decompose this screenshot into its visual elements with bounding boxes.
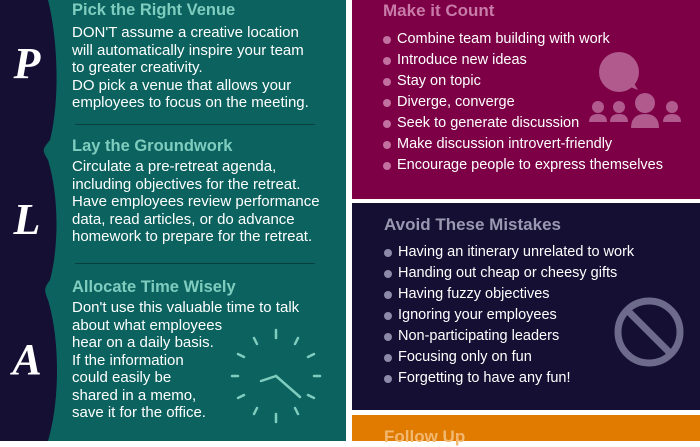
heading: Follow Up bbox=[384, 427, 465, 446]
text: homework to prepare for the retreat. bbox=[72, 228, 312, 245]
list: Focusing only on fun bbox=[398, 349, 532, 365]
text: save it for the office. bbox=[72, 404, 206, 421]
icon: clock bbox=[230, 328, 322, 424]
text: hear on a daily basis. bbox=[72, 334, 214, 351]
list: Having an itinerary unrelated to work bbox=[398, 244, 634, 260]
text: Circulate a pre-retreat agenda, bbox=[72, 158, 276, 175]
list bbox=[384, 244, 634, 386]
list: Ignoring your employees bbox=[398, 307, 557, 323]
text: DON'T assume a creative location bbox=[72, 24, 299, 41]
text: shared in a memo, bbox=[72, 386, 196, 404]
list bbox=[383, 31, 663, 173]
letter A: A bbox=[12, 335, 42, 384]
text: Have employees review performance bbox=[72, 193, 320, 210]
text: Don't use this valuable time to talk bbox=[72, 299, 299, 316]
list: Stay on topic bbox=[397, 73, 481, 89]
icon: prohibition bbox=[614, 298, 684, 366]
list: Seek to generate discussion bbox=[397, 115, 579, 131]
navy wavy strip bbox=[0, 0, 57, 441]
heading: Make it Count bbox=[383, 1, 494, 20]
letter L: L bbox=[14, 195, 40, 244]
list: Diverge, converge bbox=[397, 94, 515, 110]
heading: Pick the Right Venue bbox=[72, 1, 235, 19]
section: groundwork bbox=[72, 137, 320, 245]
letter P: P bbox=[14, 39, 40, 88]
heading: Avoid These Mistakes bbox=[384, 215, 561, 234]
heading: Allocate Time Wisely bbox=[72, 278, 236, 296]
text: to greater creativity. bbox=[72, 59, 203, 76]
text bbox=[72, 158, 320, 245]
panel: make it count bbox=[352, 0, 700, 199]
icon: people discussion bbox=[589, 52, 681, 128]
text bbox=[72, 299, 300, 421]
list: Having fuzzy objectives bbox=[398, 286, 550, 302]
text: data, read articles, or do advance bbox=[72, 210, 295, 228]
section: allocate time bbox=[72, 278, 300, 421]
text: employees to focus on the meeting. bbox=[72, 94, 309, 111]
panel: follow up bbox=[352, 415, 700, 441]
text: could easily be bbox=[72, 369, 171, 386]
text: If the information bbox=[72, 352, 184, 368]
panel: avoid mistakes bbox=[352, 203, 700, 410]
list: Make discussion introvert-friendly bbox=[397, 136, 612, 152]
text: DO pick a venue that allows your bbox=[72, 76, 291, 94]
text: about what employees bbox=[72, 316, 222, 334]
heading: Lay the Groundwork bbox=[72, 137, 232, 155]
text bbox=[72, 24, 309, 111]
text: including objectives for the retreat. bbox=[72, 176, 300, 192]
list: Non-participating leaders bbox=[398, 328, 559, 344]
list: Forgetting to have any fun! bbox=[398, 370, 570, 386]
panel: teal plan bbox=[0, 0, 346, 441]
list: Encourage people to express themselves bbox=[397, 157, 663, 173]
list: Combine team building with work bbox=[397, 31, 610, 47]
section: pick venue bbox=[72, 1, 309, 111]
list: Introduce new ideas bbox=[397, 52, 527, 68]
list: Handing out cheap or cheesy gifts bbox=[398, 265, 617, 281]
text: will automatically inspire your team bbox=[72, 42, 304, 58]
